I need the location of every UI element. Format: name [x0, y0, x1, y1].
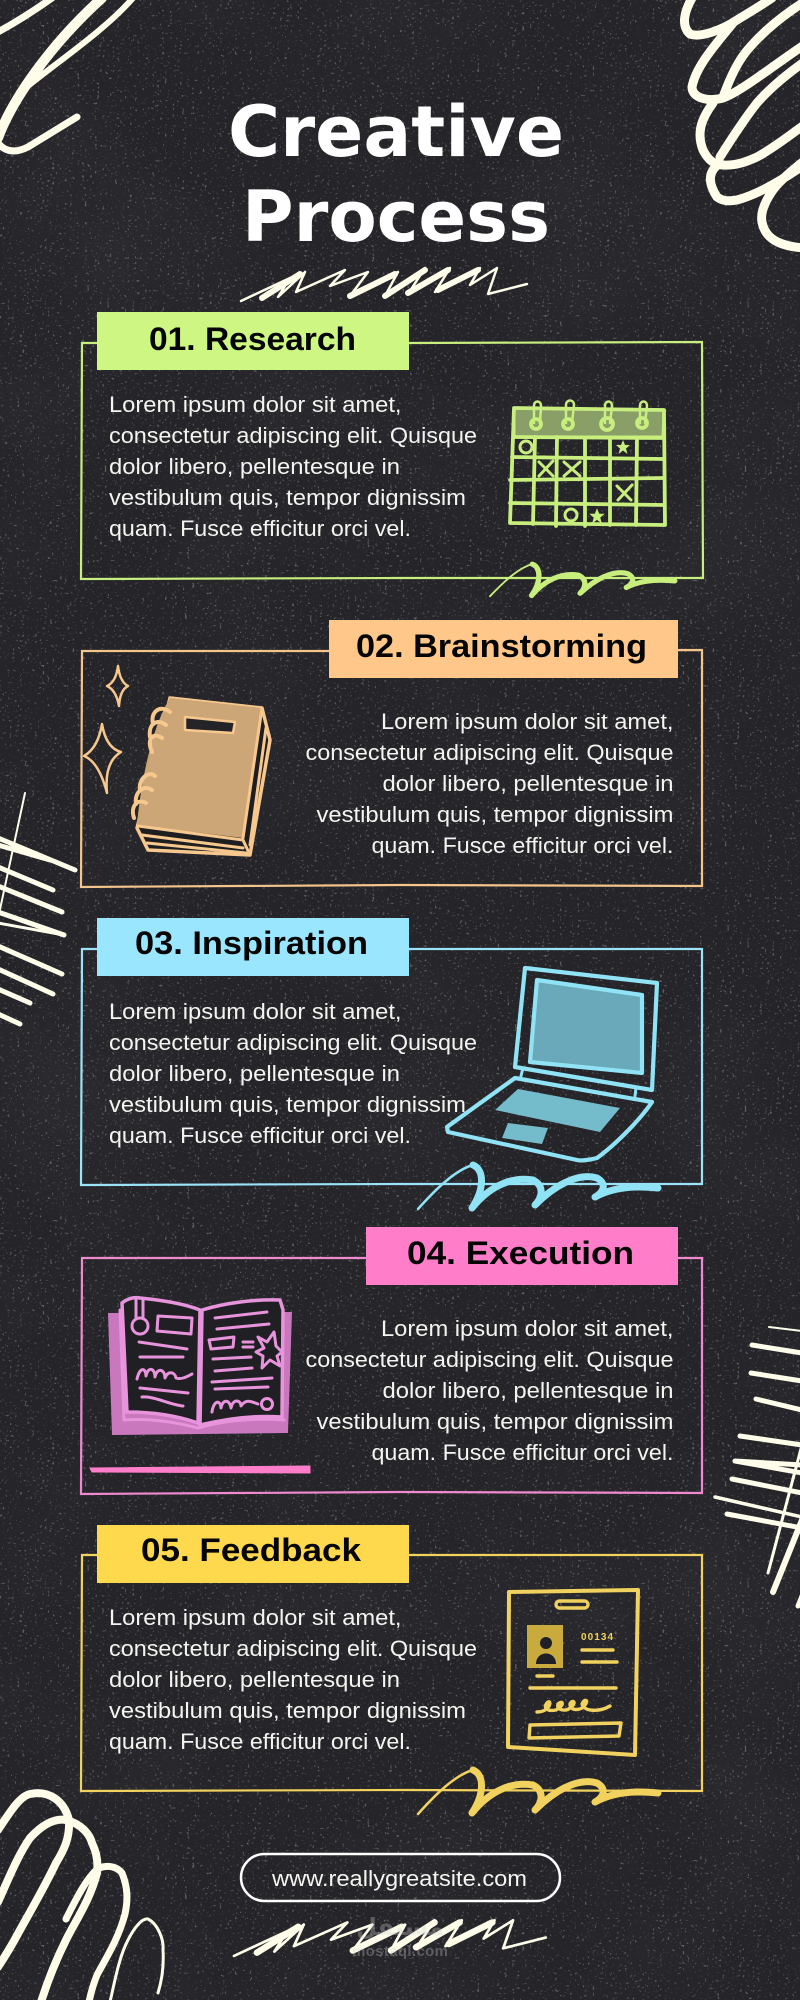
website pill: www.reallygreatsite.com [271, 1866, 527, 1891]
body text: brainstorming: Lorem ipsum dolor sit amet, [381, 709, 674, 734]
heading tab: execution: 04. Execution [407, 1235, 634, 1271]
decorative underline: execution [90, 1466, 310, 1473]
body text: research: Lorem ipsum dolor sit amet, [109, 392, 402, 417]
body text: research [109, 392, 477, 541]
heading tab: brainstorming [329, 620, 678, 678]
panel: feedback [81, 1525, 702, 1814]
body text: inspiration: dolor libero, pellentesque in [109, 1061, 400, 1086]
icon: id card: 00134 [581, 1632, 613, 1643]
frame: execution [81, 1258, 702, 1494]
body text: research: dolor libero, pellentesque in [109, 454, 400, 479]
body text: inspiration: vestibulum quis, tempor dignissim [109, 1092, 466, 1117]
body text: brainstorming: dolor libero, pellentesque in [382, 771, 674, 796]
body text: inspiration [109, 999, 477, 1148]
squiggle: inspiration [418, 1165, 658, 1209]
body text: execution [306, 1316, 674, 1465]
footer scribble [234, 1920, 546, 1956]
body text: inspiration: consectetur adipiscing elit. Quisque [109, 1030, 477, 1055]
frame: feedback [81, 1555, 702, 1791]
scribble: top left [0, 0, 133, 151]
body text: research: quam. Fusce efficitur orci vel. [109, 516, 411, 541]
panel: brainstorming [81, 620, 702, 887]
frame: brainstorming [81, 650, 702, 887]
title: Process [242, 176, 550, 258]
body text: brainstorming: vestibulum quis, tempor dignissim [316, 802, 674, 827]
title underline scribble [241, 268, 527, 301]
title [228, 91, 564, 258]
squiggle: research [490, 564, 675, 596]
panel: inspiration [81, 918, 702, 1209]
frame: research [81, 342, 703, 579]
heading tab: brainstorming: 02. Brainstorming [356, 628, 647, 664]
watermark: مستقل [356, 1913, 444, 1941]
icon: open book [108, 1298, 292, 1435]
body text: execution: dolor libero, pellentesque in [382, 1378, 674, 1403]
body text: feedback: Lorem ipsum dolor sit amet, [109, 1605, 402, 1630]
panel: research [81, 312, 703, 596]
body text: execution: quam. Fusce efficitur orci vel. [372, 1440, 674, 1465]
icon: id card [508, 1590, 638, 1755]
body text: brainstorming [306, 709, 674, 858]
body text: execution: vestibulum quis, tempor dignissim [316, 1409, 674, 1434]
body text: research: consectetur adipiscing elit. Quisque [109, 423, 477, 448]
scribble: top right [684, 0, 800, 248]
body text: execution: Lorem ipsum dolor sit amet, [381, 1316, 674, 1341]
panel: execution [81, 1227, 702, 1494]
body text: research: vestibulum quis, tempor dignissim [109, 485, 466, 510]
body text: inspiration: Lorem ipsum dolor sit amet, [109, 999, 402, 1024]
heading tab: inspiration: 03. Inspiration [135, 925, 368, 961]
body text: feedback: quam. Fusce efficitur orci vel. [109, 1729, 411, 1754]
scribble: bottom left [0, 1793, 163, 2000]
heading tab: execution [366, 1227, 678, 1285]
heading tab: research: 01. Research [149, 321, 356, 357]
body text: feedback: vestibulum quis, tempor dignissim [109, 1698, 466, 1723]
scribble: left middle [0, 793, 75, 1024]
website pill [241, 1854, 560, 1901]
body text: inspiration: quam. Fusce efficitur orci vel. [109, 1123, 411, 1148]
scribble: right middle [715, 1327, 800, 1606]
watermark [352, 1913, 448, 1960]
body text: feedback [109, 1605, 477, 1754]
body text: brainstorming: quam. Fusce efficitur orci vel. [372, 833, 674, 858]
heading tab: feedback: 05. Feedback [141, 1532, 361, 1568]
body text: execution: consectetur adipiscing elit. Quisque [306, 1347, 674, 1372]
watermark: mostaql.com [352, 1943, 448, 1960]
icon: laptop [447, 968, 657, 1160]
icon: notebook [133, 698, 270, 855]
squiggle: feedback [418, 1770, 658, 1814]
body text: feedback: consectetur adipiscing elit. Quisque [109, 1636, 477, 1661]
heading tab: research [97, 312, 409, 370]
icon: calendar [510, 400, 665, 526]
body text: brainstorming: consectetur adipiscing elit. Quisque [306, 740, 674, 765]
heading tab: inspiration [97, 918, 409, 976]
title: Creative [228, 91, 564, 173]
heading tab: feedback [97, 1525, 409, 1583]
icon: sparkles [84, 666, 128, 793]
body text: feedback: dolor libero, pellentesque in [109, 1667, 400, 1692]
frame: inspiration [81, 949, 702, 1185]
